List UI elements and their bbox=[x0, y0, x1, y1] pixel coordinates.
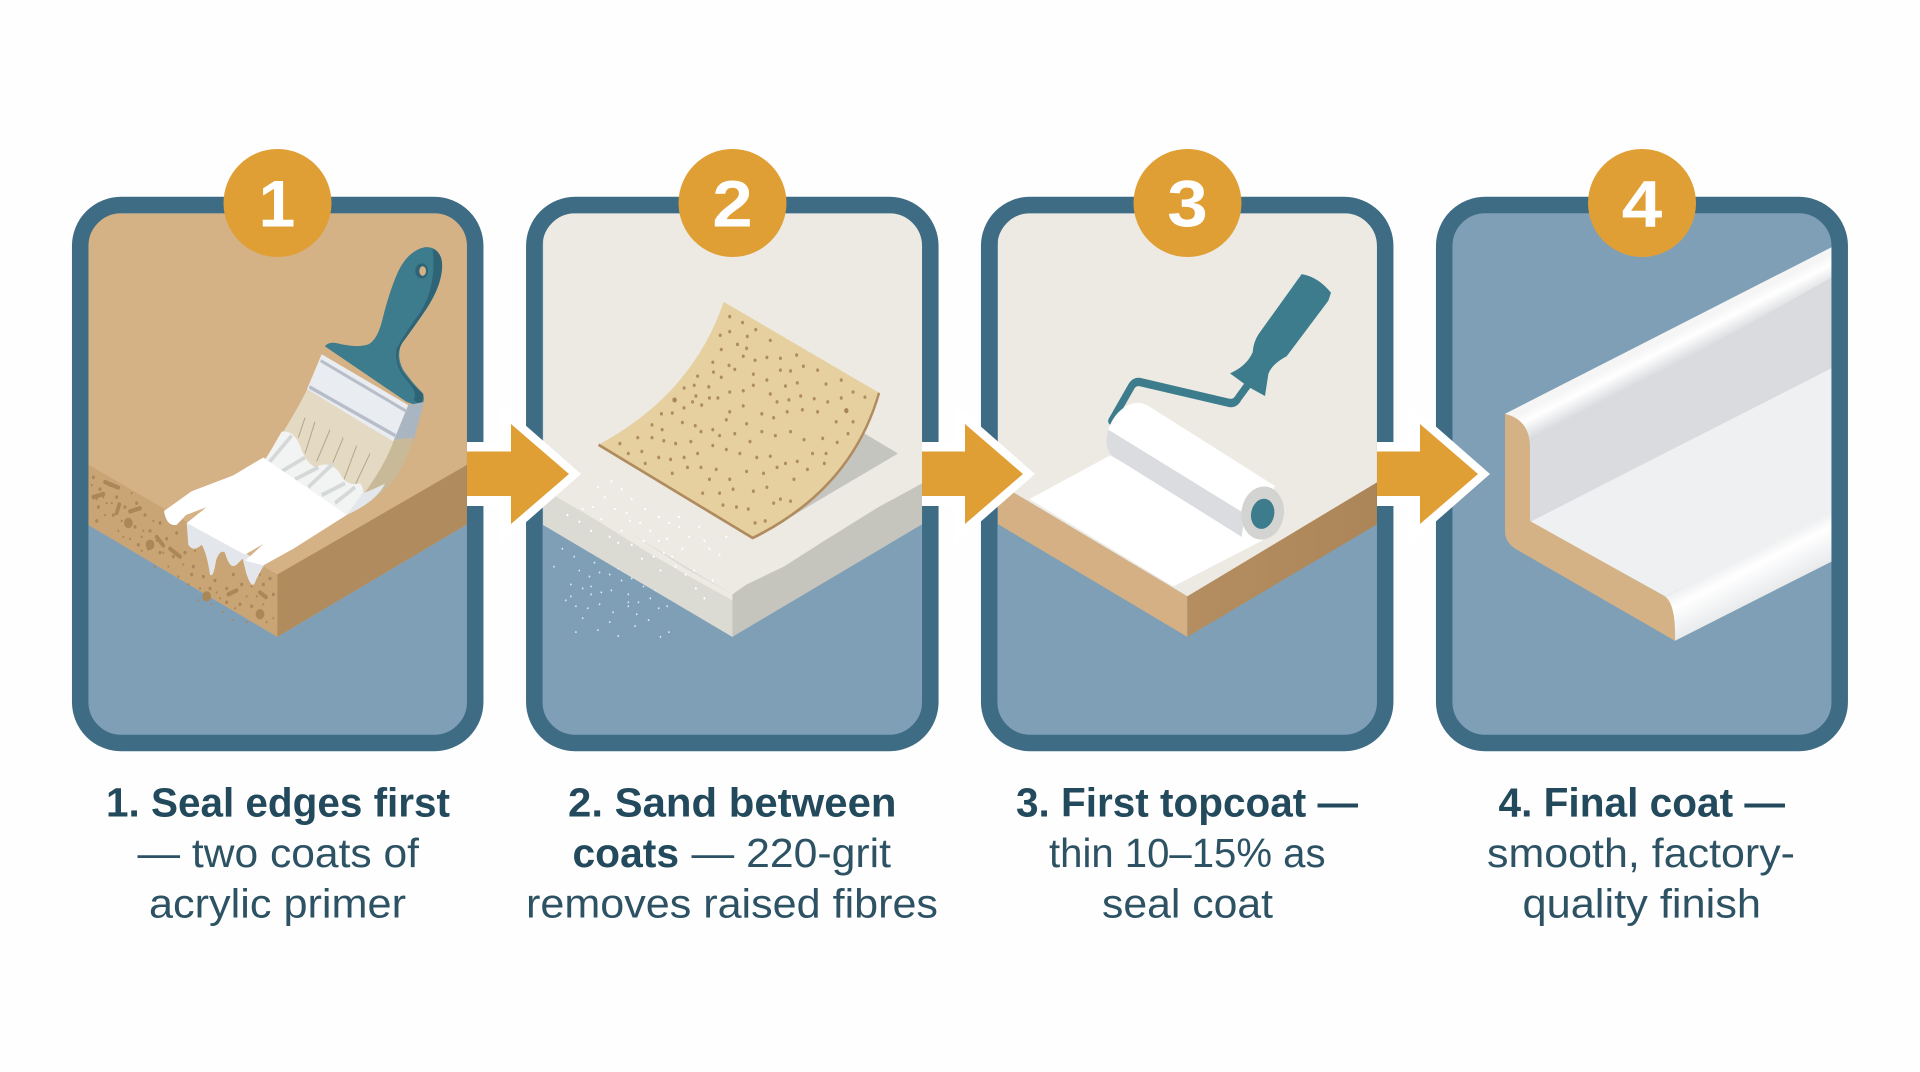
number badge 4: 4 bbox=[1622, 166, 1663, 240]
arrow 3 bbox=[1377, 403, 1490, 545]
icon: paint brush bbox=[262, 247, 442, 515]
panel 3: first topcoat bbox=[989, 205, 1385, 743]
number badge 4 bbox=[1588, 149, 1696, 257]
sanding dust falling on blue bbox=[554, 549, 669, 637]
white paint stroke with drips bbox=[164, 457, 385, 585]
caption 2 bbox=[526, 780, 938, 926]
caption 4: quality finish bbox=[1522, 880, 1761, 926]
caption 3: 3. First topcoat — bbox=[1016, 780, 1358, 826]
caption 2: — 220-grit bbox=[692, 830, 892, 876]
caption 1: 1. Seal edges first bbox=[106, 780, 450, 826]
panel 1: seal edges bbox=[80, 205, 475, 743]
number badge 2: 2 bbox=[712, 166, 753, 240]
panel border bbox=[989, 205, 1385, 743]
sheet of sandpaper bbox=[599, 302, 879, 538]
caption 1: acrylic primer bbox=[149, 880, 406, 926]
number badge 1 bbox=[224, 149, 332, 257]
finished moulding bbox=[1505, 246, 1833, 641]
caption 2: coats bbox=[572, 830, 679, 876]
arrow 1 bbox=[467, 403, 581, 545]
caption 4 bbox=[1487, 780, 1795, 926]
arrow 2 bbox=[922, 403, 1035, 545]
caption 2: removes raised fibres bbox=[526, 880, 938, 926]
white paint area bbox=[1029, 455, 1263, 586]
panel 4: final coat bbox=[1444, 205, 1840, 743]
caption 3: seal coat bbox=[1102, 880, 1274, 926]
porous end grain face bbox=[88, 465, 277, 637]
caption 1: — two coats of bbox=[138, 830, 420, 876]
icon: paint roller bbox=[1106, 274, 1331, 549]
panel 2: sand between coats bbox=[534, 205, 930, 743]
number badge 3: 3 bbox=[1167, 166, 1208, 240]
caption 3 bbox=[1016, 780, 1358, 926]
sanding dust on slab bbox=[567, 481, 726, 598]
number badge 1: 1 bbox=[259, 166, 295, 240]
number badge 3 bbox=[1134, 149, 1242, 257]
caption 1 bbox=[106, 780, 450, 926]
panel border bbox=[1444, 205, 1840, 743]
panel border bbox=[534, 205, 930, 743]
sandpaper shadow bbox=[791, 432, 898, 517]
caption 3: thin 10–15% as bbox=[1049, 830, 1326, 876]
number badge 2 bbox=[678, 149, 786, 257]
caption 4: smooth, factory- bbox=[1487, 830, 1795, 876]
caption 2: 2. Sand between bbox=[568, 780, 896, 826]
panel border bbox=[80, 205, 475, 743]
caption 4: 4. Final coat — bbox=[1498, 780, 1785, 826]
